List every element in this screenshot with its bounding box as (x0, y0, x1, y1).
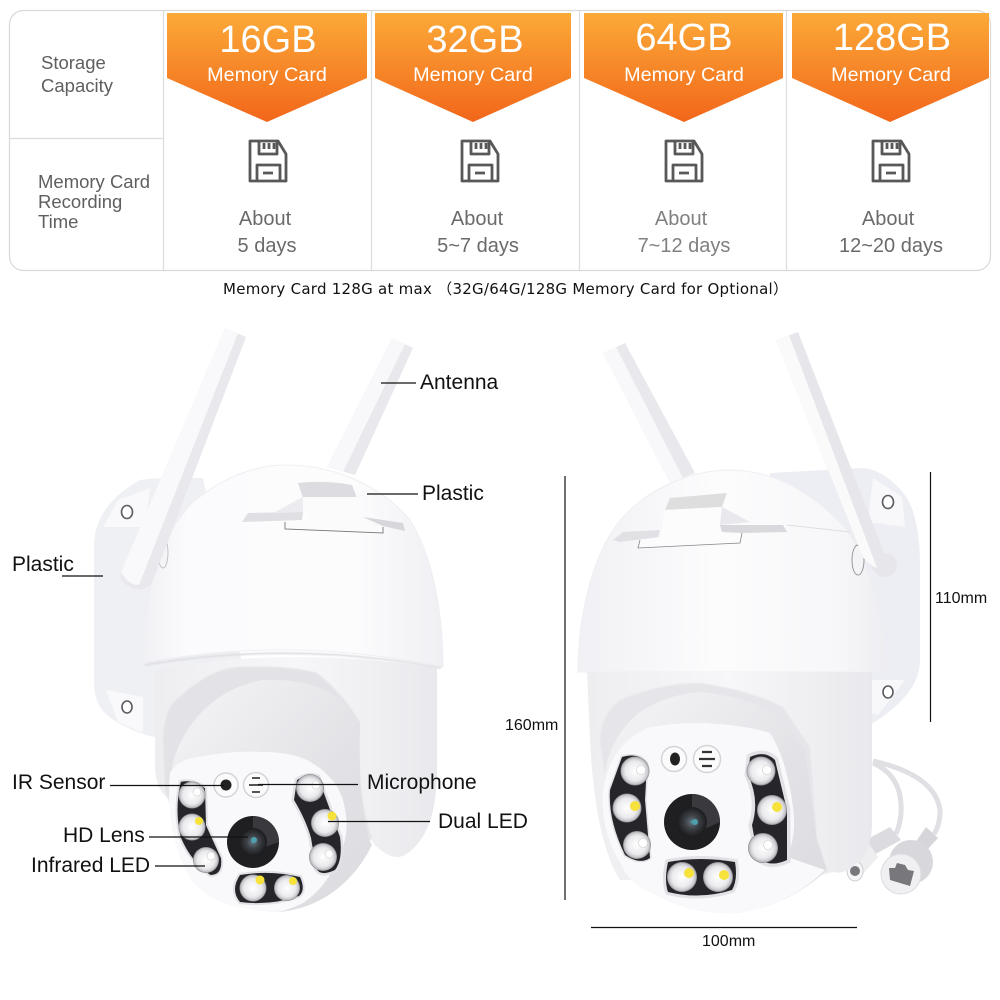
LED strip: bottom (666, 859, 736, 896)
antenna: right (776, 332, 888, 573)
row heading: recording time: Recording (38, 191, 122, 212)
recording time: 7~12 days: 7~12 days (638, 235, 730, 257)
face plate (603, 723, 825, 913)
callout: infrared LED: Infrared LED (31, 854, 150, 877)
banner: 16GB (167, 13, 367, 122)
recording time: 5 days: 5 days (238, 235, 296, 257)
antenna: rear (327, 338, 413, 475)
recording time: 12~20 days: About (862, 208, 914, 230)
callout: dual LED: Dual LED (438, 810, 528, 833)
recording time: 5~7 days: 5~7 days (437, 235, 519, 257)
rim shadow (578, 672, 885, 674)
dimension: height 160mm: 160mm (505, 717, 558, 734)
LED strip: left (610, 756, 650, 861)
callout: plastic top (367, 482, 484, 505)
side button (852, 545, 864, 575)
lens (664, 794, 720, 850)
banner: 32GB: 32GB (426, 19, 524, 61)
banner: 128GB: Memory Card (831, 64, 951, 86)
LED strip: right (748, 754, 787, 864)
recording time: 5~7 days: About (451, 208, 503, 230)
row heading: recording time: Memory Card (38, 171, 150, 192)
dome vent (242, 482, 405, 533)
icon: memory card 3 (666, 141, 702, 181)
plate ears (868, 478, 905, 715)
dome (578, 470, 885, 672)
mounting holes (122, 506, 132, 713)
IR sensor (662, 746, 686, 772)
ball (170, 680, 372, 912)
banner: 64GB: 64GB (635, 17, 733, 59)
row heading: storage capacity: Capacity (41, 75, 114, 96)
banner: 16GB: 16GB (219, 19, 317, 61)
plate ears (103, 488, 150, 733)
callout: IR sensor: IR Sensor (12, 771, 105, 794)
callout: HD lens: HD Lens (63, 824, 145, 847)
banner: 64GB: Memory Card (624, 64, 744, 86)
wall plate (94, 478, 250, 737)
callout: microphone: Microphone (367, 771, 477, 794)
LED strip: left (176, 780, 222, 876)
body (155, 657, 437, 857)
side button (158, 538, 168, 568)
icon: memory card 2 (462, 141, 498, 181)
ethernet connector (881, 827, 938, 894)
microphone (694, 746, 720, 772)
row heading: storage capacity: Storage (41, 52, 106, 73)
note: memory card maximum: Memory Card 128G at max （32G/64G/128G Memory Card for Optional） (223, 280, 788, 298)
banner: 128GB (792, 13, 989, 122)
microphone (244, 772, 268, 798)
row heading: recording time: Time (38, 211, 78, 232)
ball (603, 692, 827, 913)
LEDs (178, 774, 339, 902)
dome (143, 465, 443, 667)
mounting holes (882, 496, 894, 698)
DC connector (845, 827, 901, 881)
antenna joint (873, 553, 897, 577)
recess band (600, 683, 827, 890)
camera: front view (94, 328, 443, 912)
recording time: 7~12 days: About (655, 208, 707, 230)
IR sensor (214, 773, 238, 797)
dimension: height 110mm: 110mm (935, 590, 987, 607)
wall plate (770, 468, 920, 730)
LED strip: right (294, 776, 341, 873)
callout: plastic left (12, 553, 103, 576)
banner: 16GB: Memory Card (207, 64, 327, 86)
callout: plastic top: Plastic (422, 482, 484, 505)
rim shadow (145, 653, 441, 668)
recess band (163, 667, 372, 870)
recording time: 12~20 days: 12~20 days (839, 235, 943, 257)
body (587, 672, 872, 880)
LED strip: bottom (235, 873, 303, 903)
antenna: left (603, 343, 695, 483)
icon: memory card 1 (250, 141, 286, 181)
dimension: width 100mm: 100mm (702, 933, 755, 950)
banner: 64GB (584, 13, 783, 122)
recording time: 5 days: About (239, 208, 291, 230)
lens (227, 816, 279, 868)
callout: plastic left: Plastic (12, 553, 74, 576)
antenna: front (120, 328, 246, 589)
dome vent (613, 493, 850, 548)
face plate (169, 752, 346, 912)
panel: memory card table (10, 10, 990, 270)
icon: memory card 4 (873, 141, 909, 181)
banner: 128GB: 128GB (833, 17, 951, 59)
callout: antenna (381, 371, 499, 394)
banner: 32GB: Memory Card (413, 64, 533, 86)
LEDs (612, 756, 787, 892)
banner: 32GB (375, 13, 571, 122)
camera: rear angled view (578, 332, 940, 913)
cables (873, 761, 940, 834)
callout: antenna: Antenna (420, 371, 499, 394)
